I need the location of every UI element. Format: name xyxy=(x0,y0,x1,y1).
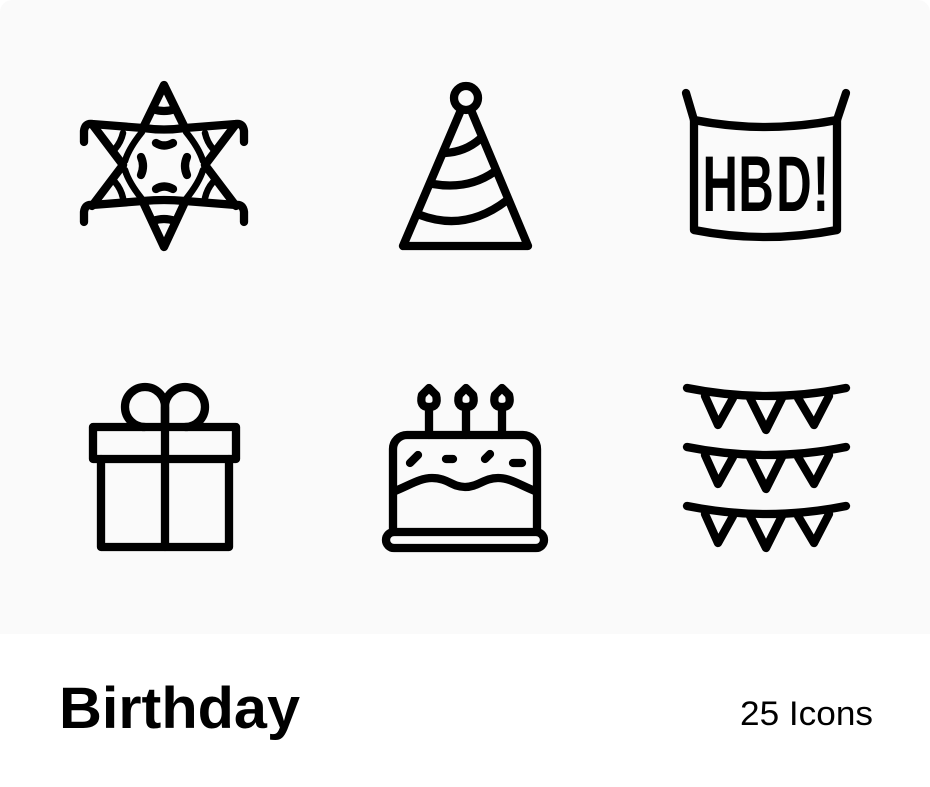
icon: HBD banner xyxy=(686,93,846,237)
title: Birthday xyxy=(59,676,300,741)
top bunting xyxy=(687,388,846,430)
icon: bunting flags xyxy=(687,388,846,548)
icon: birthday cake xyxy=(386,388,544,548)
icon: gift box xyxy=(93,387,236,547)
icon: party hat xyxy=(403,86,528,246)
icon count: 25 Icons xyxy=(740,695,873,733)
icon: star pinata xyxy=(84,85,244,247)
bottom bunting xyxy=(687,506,846,548)
middle bunting xyxy=(687,447,846,489)
banner lettering: HBD! xyxy=(702,140,829,228)
